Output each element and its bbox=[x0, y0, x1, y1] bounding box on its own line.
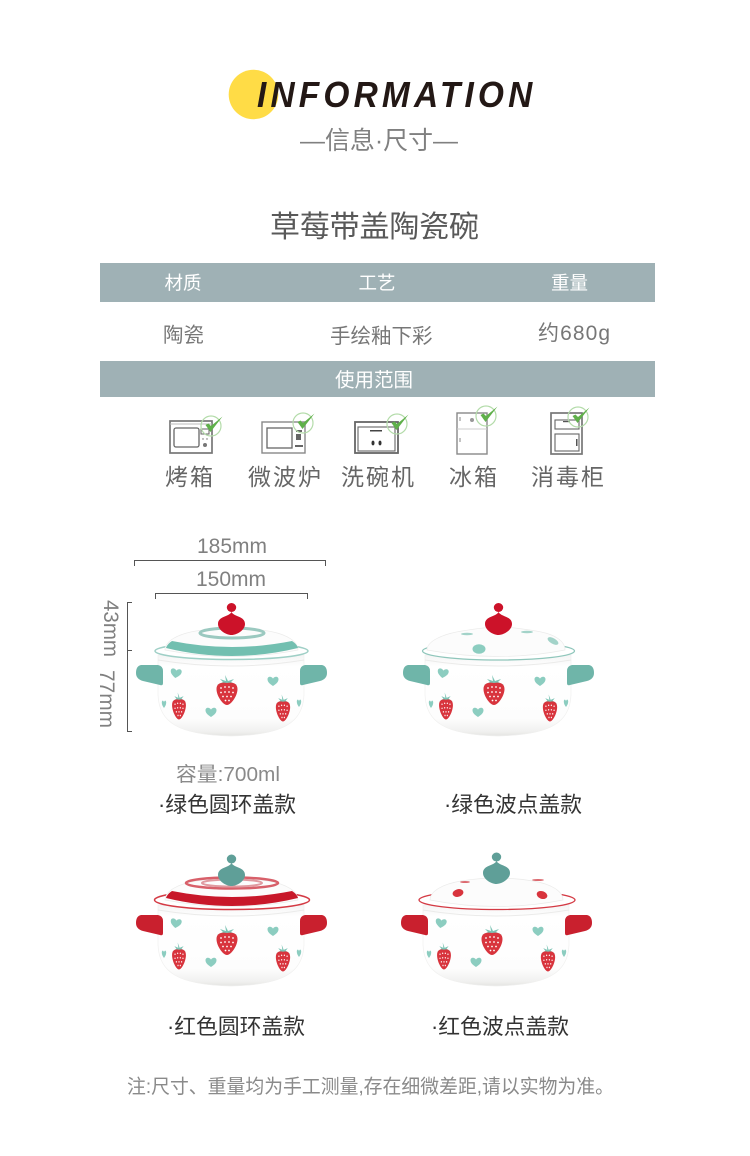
spec values: 陶瓷 bbox=[163, 324, 204, 347]
header labels: 工艺 bbox=[358, 272, 396, 294]
table header bar bbox=[100, 263, 655, 302]
label: oven: 烤箱 bbox=[165, 464, 213, 490]
usage heading: 使用范围 bbox=[335, 370, 413, 392]
product name: 草莓带盖陶瓷碗 bbox=[270, 211, 479, 244]
spec values: 约680g bbox=[538, 322, 610, 345]
footnote: 注:尺寸、重量均为手工测量,存在细微差距,请以实物为准。 bbox=[127, 1076, 614, 1098]
height label 77mm: 77mm bbox=[95, 670, 118, 728]
product: green ring lid bbox=[136, 603, 327, 736]
usage bar bbox=[100, 361, 655, 397]
product: red ring lid bbox=[136, 854, 327, 986]
spec values bbox=[163, 322, 610, 348]
height label 43mm: 43mm bbox=[99, 600, 122, 657]
icon: microwave bbox=[262, 413, 314, 453]
yellow circle bbox=[229, 70, 278, 119]
icon: fridge bbox=[457, 406, 498, 454]
width bracket 185 bbox=[134, 560, 326, 566]
heading: INFORMATION bbox=[257, 76, 533, 115]
height bracket bbox=[128, 602, 132, 732]
product label: red ring: ·红色圆环盖款 bbox=[167, 1014, 305, 1039]
dimensions bbox=[95, 535, 326, 732]
label: dishwasher: 洗碗机 bbox=[341, 464, 414, 490]
label: microwave: 微波炉 bbox=[248, 464, 321, 490]
product label: green ring: ·绿色圆环盖款 bbox=[158, 792, 296, 817]
icon: oven bbox=[170, 416, 222, 453]
label: sterilizer: 消毒柜 bbox=[531, 464, 604, 490]
product: red dot lid bbox=[401, 852, 592, 986]
icon: sterilizer bbox=[551, 407, 590, 454]
product: green dot lid bbox=[403, 603, 594, 736]
subtitle: —信息·尺寸— bbox=[300, 127, 458, 155]
header labels: 重量 bbox=[551, 272, 588, 294]
capacity: 容量:700ml bbox=[176, 763, 280, 786]
table: specs bbox=[100, 263, 655, 397]
product label: red dot: ·红色波点盖款 bbox=[431, 1014, 569, 1039]
label: fridge: 冰箱 bbox=[449, 464, 497, 490]
width bracket 150 bbox=[156, 594, 308, 599]
icon: dishwasher bbox=[355, 414, 408, 453]
title: INFORMATION bbox=[229, 70, 533, 119]
header labels bbox=[164, 272, 588, 294]
width label 185mm: 185mm bbox=[197, 535, 267, 558]
spec values: 手绘釉下彩 bbox=[330, 325, 432, 348]
product label: green dot: ·绿色波点盖款 bbox=[444, 792, 582, 817]
width label 150mm: 150mm bbox=[196, 568, 266, 591]
header labels: 材质 bbox=[164, 272, 202, 294]
